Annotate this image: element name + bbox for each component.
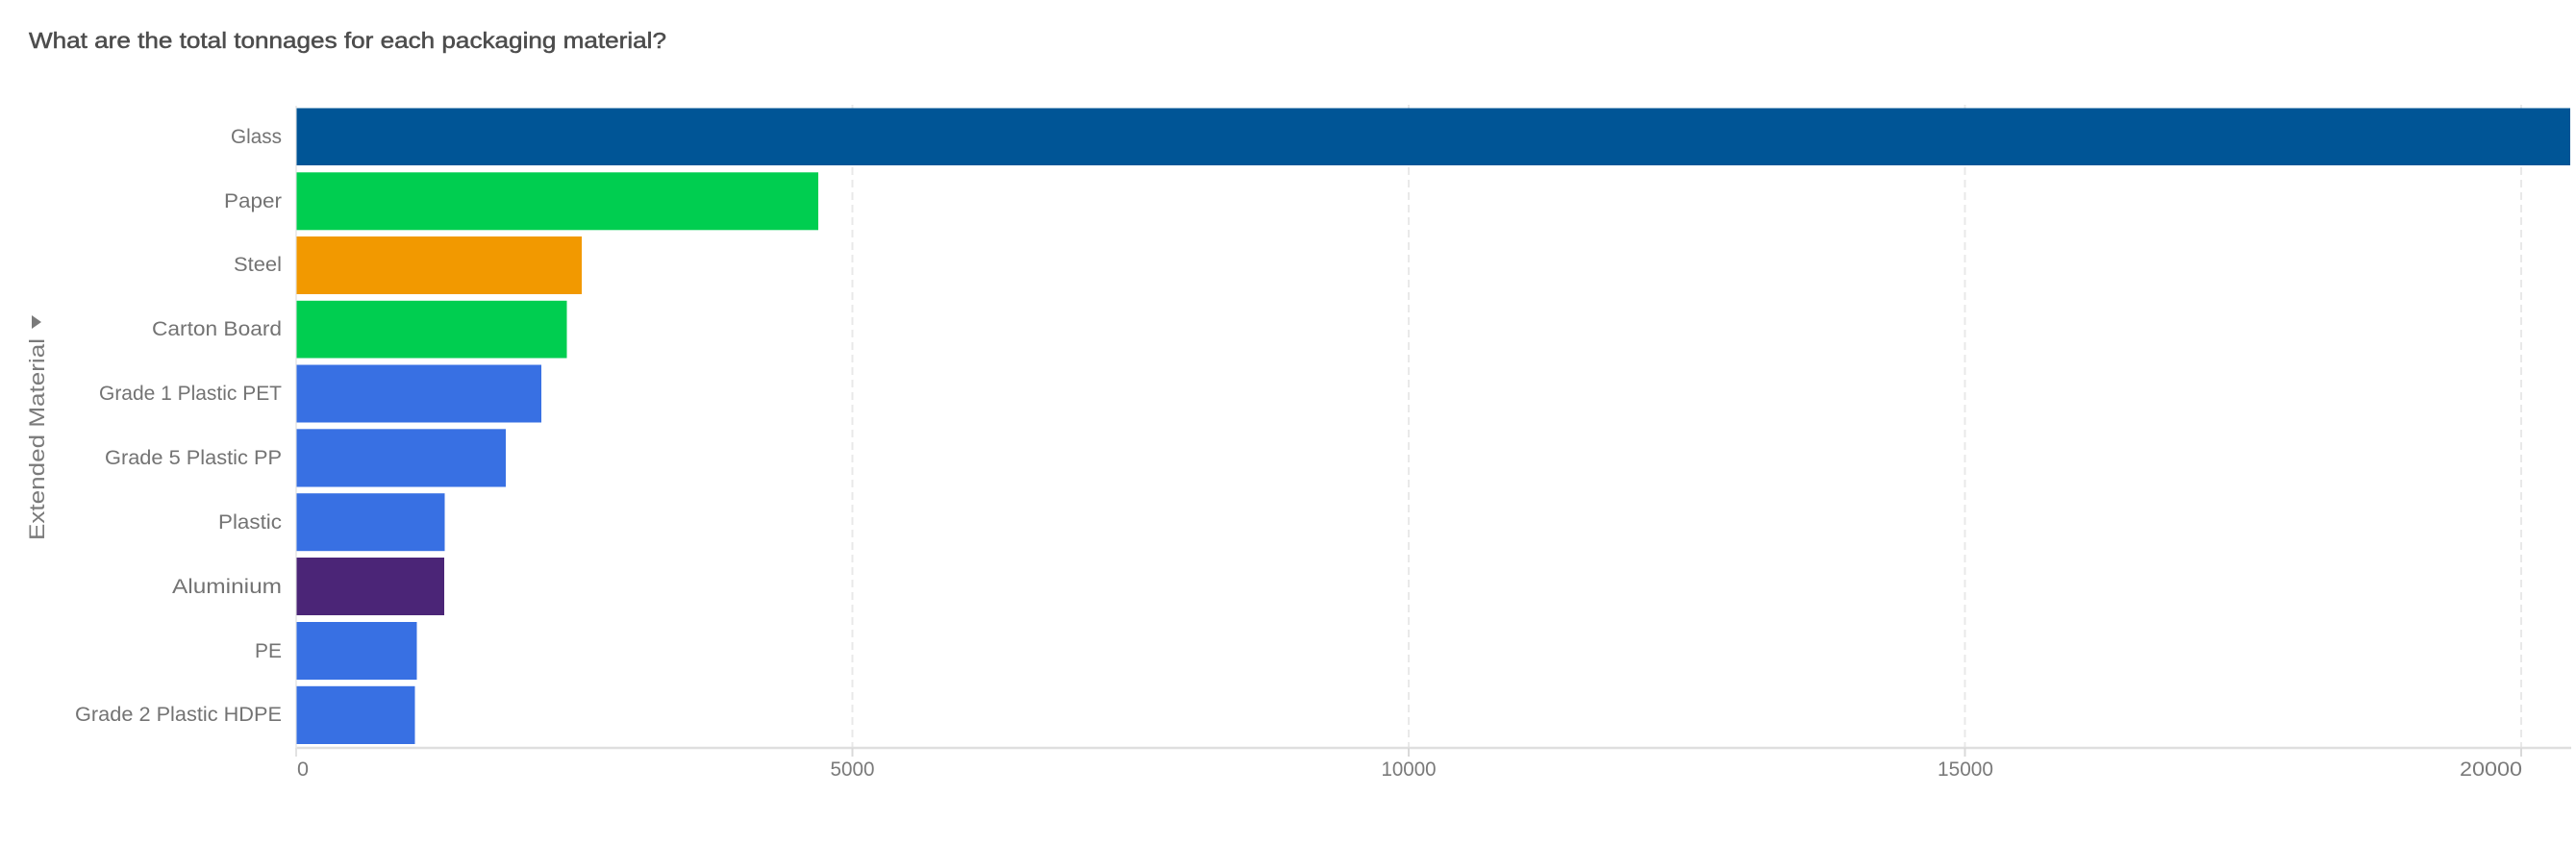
bar: Plastic	[218, 493, 444, 551]
bar: Paper	[224, 172, 818, 230]
y axis line	[295, 106, 297, 757]
x axis: 0	[297, 758, 309, 781]
bar: Steel: Steel	[234, 254, 282, 276]
bar: Grade 2 Plastic HDPE	[75, 686, 415, 744]
gridlines	[852, 105, 2521, 757]
bar: Aluminium	[172, 558, 444, 615]
bar: Glass	[231, 108, 2570, 165]
x axis	[296, 748, 2571, 781]
bar: Grade 1 Plastic PET	[99, 365, 541, 423]
bar: Grade 2 Plastic HDPE: Grade 2 Plastic HDPE	[75, 704, 282, 726]
x axis: 5000	[831, 758, 875, 781]
bar: Glass: Glass	[231, 126, 282, 148]
x axis: 10000	[1381, 758, 1437, 781]
bar: PE: PE	[255, 640, 282, 662]
x axis: 20000	[2460, 758, 2522, 781]
horizontal bar chart	[25, 105, 2571, 781]
bar: PE	[255, 622, 417, 680]
bar: Grade 5 Plastic PP: Grade 5 Plastic PP	[105, 447, 282, 469]
title: What are the total tonnages for each packaging material?	[29, 28, 666, 53]
y axis title: Extended Material	[25, 338, 49, 540]
bar: Grade 1 Plastic PET: Grade 1 Plastic PET	[99, 383, 282, 405]
bar: Grade 5 Plastic PP	[105, 429, 506, 486]
bar: Carton Board	[152, 301, 567, 358]
x axis: 15000	[1938, 758, 1993, 781]
bar: Aluminium: Aluminium	[172, 576, 282, 598]
bar: Plastic: Plastic	[218, 511, 282, 534]
bar: Carton Board: Carton Board	[152, 318, 282, 340]
bar: Steel	[234, 236, 582, 294]
bar: Paper: Paper	[224, 190, 282, 212]
